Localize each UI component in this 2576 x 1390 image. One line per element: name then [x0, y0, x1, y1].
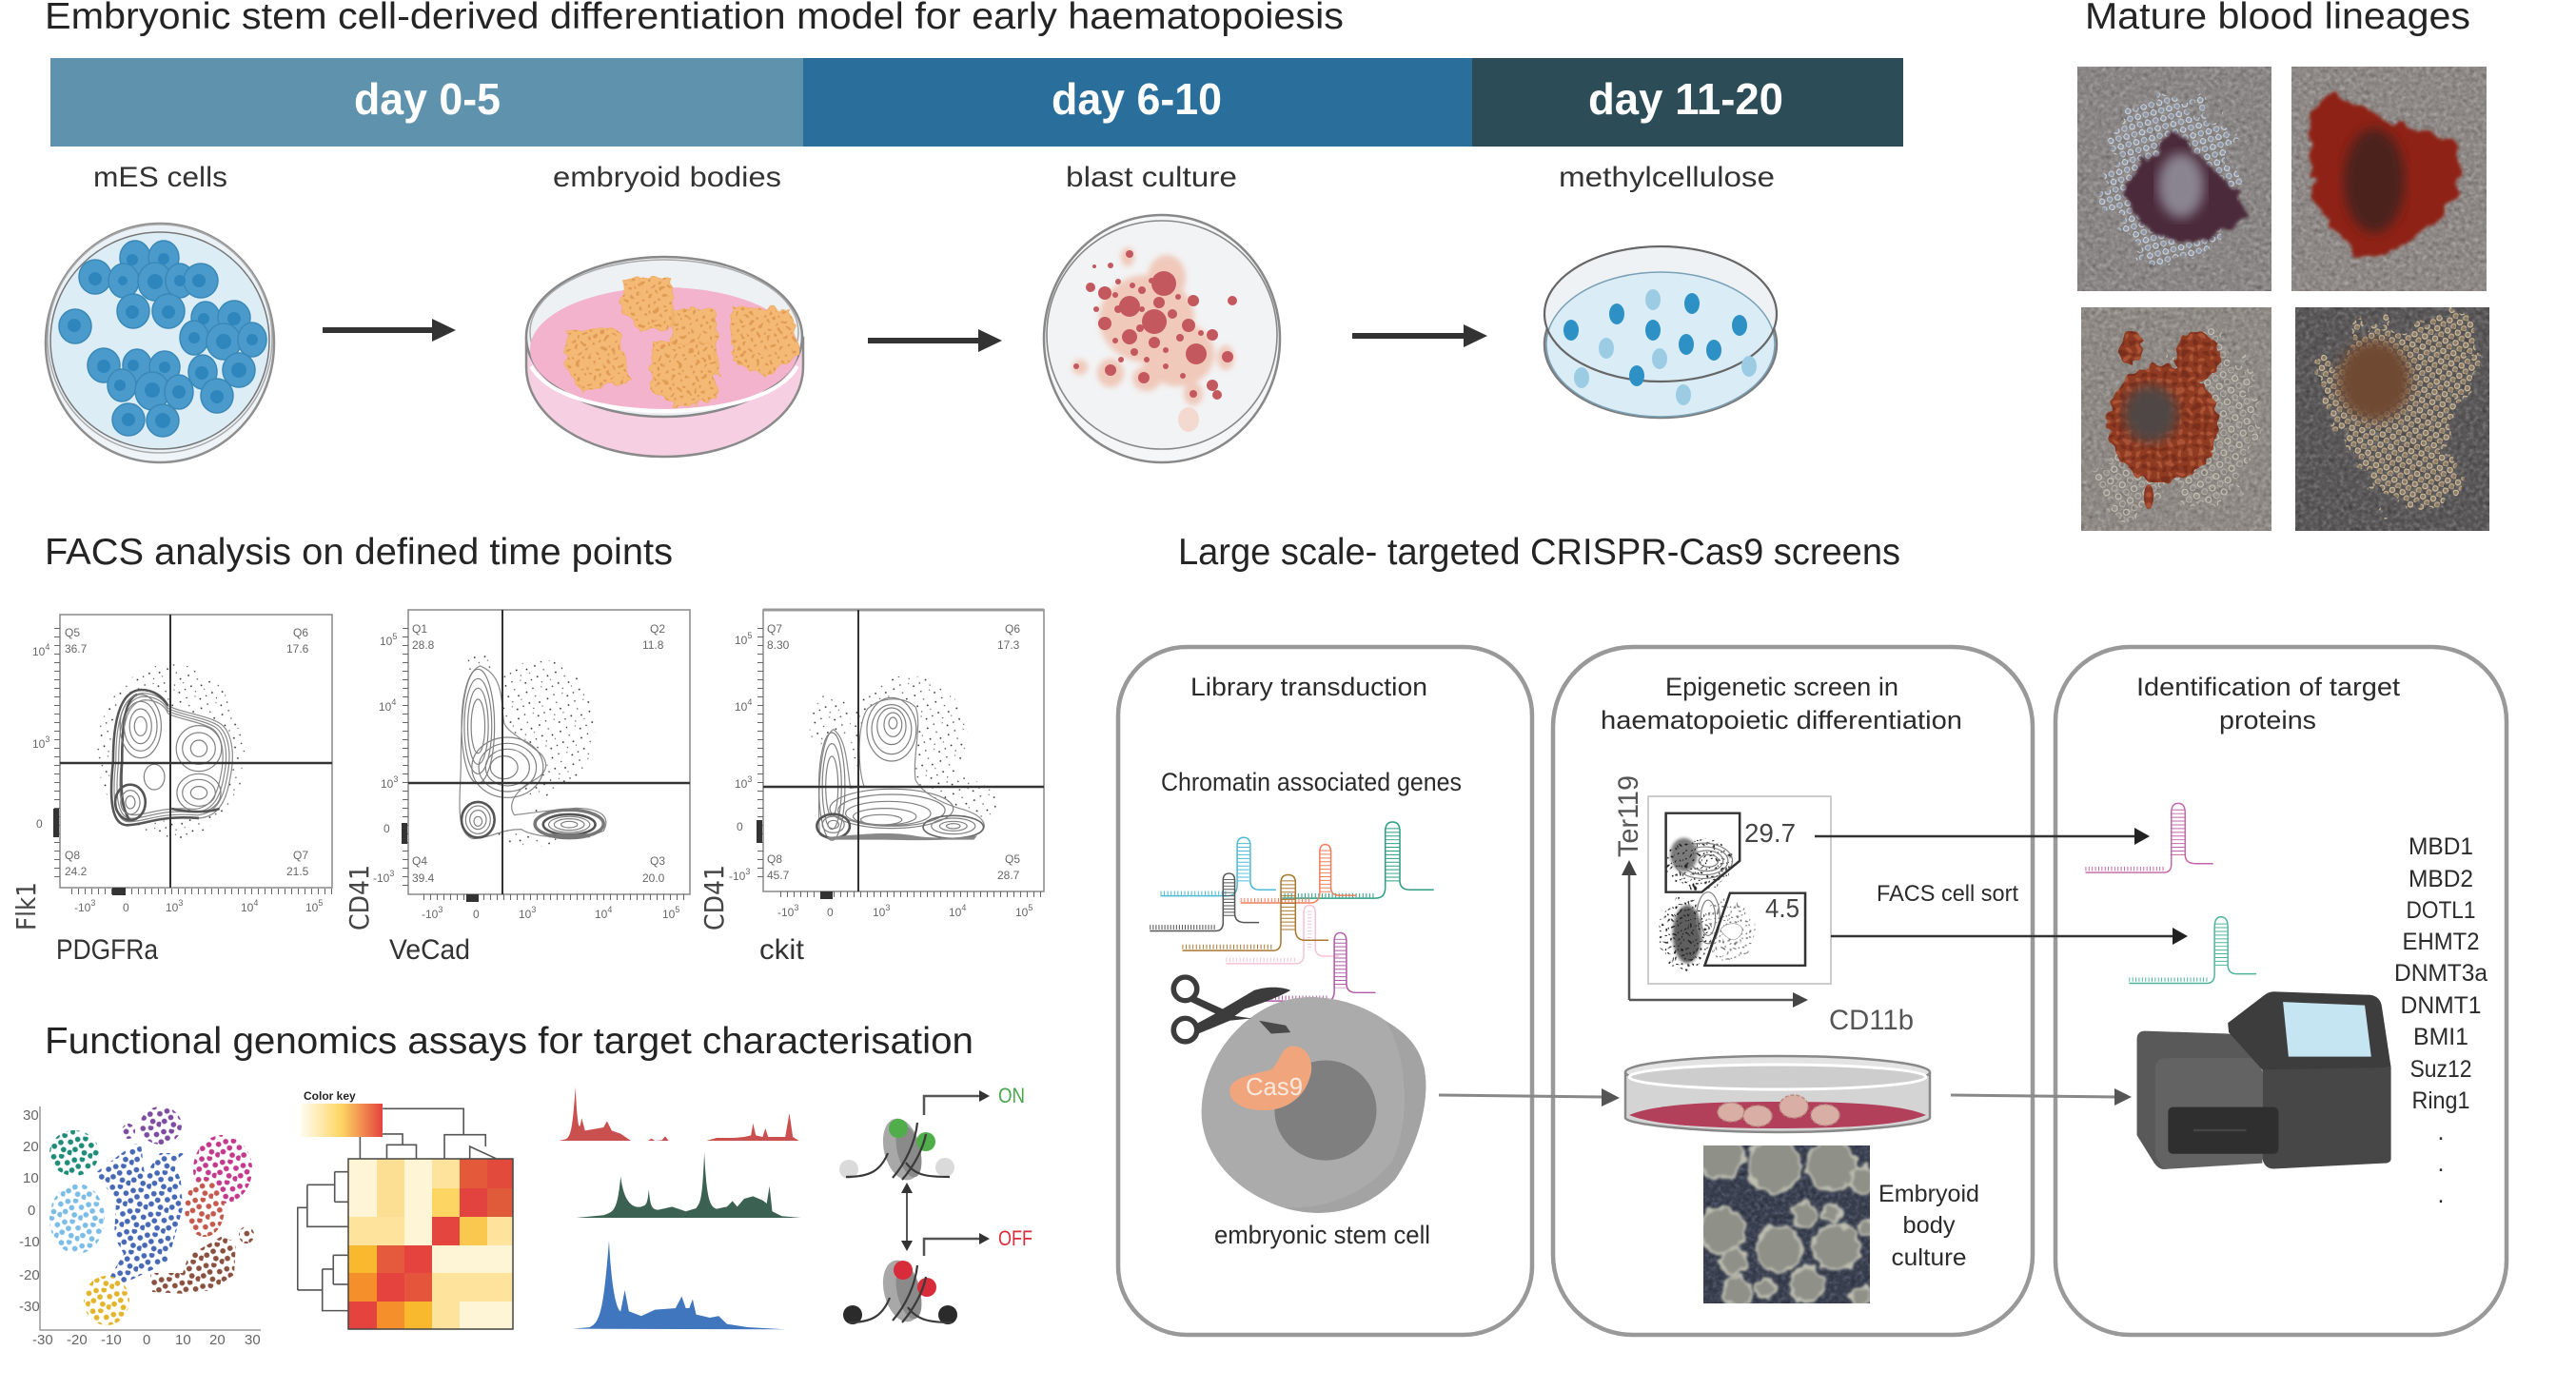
photo: colony 3 [2081, 307, 2271, 531]
arrow [868, 329, 1002, 352]
chart: FACS plot ckit vs CD41: 4 [961, 903, 966, 912]
list: target genes: . [2438, 1119, 2444, 1145]
chart: FACS plot VeCad vs CD41: 11.8 [642, 638, 664, 652]
diagram: nucleosome OFF state: OFF [998, 1226, 1032, 1250]
chart: genomic signal tracks [559, 1087, 801, 1329]
label: mES cells: mES cells [93, 162, 227, 193]
photo: embryoid body culture [1703, 1145, 1870, 1303]
chart: FACS plot VeCad vs CD41: 10 [379, 700, 391, 714]
axis label: ckit: ckit [759, 934, 805, 966]
chart: Ter119 vs CD11b gating: 4.5 [1765, 893, 1799, 923]
list: target genes: Ring1 [2411, 1087, 2470, 1114]
chart: FACS plot PDGFRa vs Flk1: Q5 [65, 626, 80, 639]
chart: FACS plot VeCad vs CD41: 0 [473, 908, 480, 921]
list: target genes: . [2438, 1150, 2444, 1177]
chart: FACS plot PDGFRa vs Flk1: 10 [305, 901, 318, 914]
diagram: nucleosome ON state: ON [998, 1084, 1025, 1107]
list: target genes: DNMT1 [2400, 992, 2482, 1019]
chart: FACS plot ckit vs CD41: 17.3 [997, 638, 1020, 652]
chart: t-SNE scatter: -20 [19, 1267, 40, 1283]
chart: FACS plot VeCad vs CD41: 3 [531, 905, 536, 914]
chart: FACS plot VeCad vs CD41: -10 [373, 871, 389, 885]
list: target genes: MBD1 [2409, 833, 2473, 860]
arrow: sort gate to green sgRNA [1831, 928, 2188, 945]
label: chromatin associated genes: Chromatin associated genes [1161, 768, 1462, 796]
chart: FACS plot PDGFRa vs Flk1: 3 [90, 898, 95, 908]
icon: blast culture dish [1044, 215, 1280, 462]
icon: sgRNA library [1150, 822, 1434, 1001]
chart: FACS plot PDGFRa vs Flk1: Q7 [293, 849, 308, 862]
list: target genes [2394, 833, 2488, 1208]
chart: FACS plot ckit vs CD41: 10 [949, 906, 961, 919]
panel heading [1601, 673, 1962, 734]
list: target genes: Suz12 [2409, 1056, 2472, 1083]
axis label: CD41: CD41 [698, 865, 730, 930]
chart: FACS plot PDGFRa vs Flk1: 4 [253, 898, 258, 908]
icon: embryoid body dish [526, 257, 803, 457]
chart: FACS plot PDGFRa vs Flk1: 10 [166, 901, 178, 914]
chart: FACS plot PDGFRa vs Flk1: 0 [123, 901, 129, 914]
arrow: switch between states [901, 1183, 913, 1251]
chart: FACS plot ckit vs CD41: 8.30 [767, 638, 790, 652]
icon: scissors [1173, 977, 1290, 1042]
chart: FACS plot VeCad vs CD41: 10 [519, 908, 531, 921]
chart: FACS plot VeCad vs CD41: 10 [381, 777, 393, 791]
label: methylcellulose: methylcellulose [1559, 162, 1775, 193]
heading: FACS analysis: FACS analysis on defined time points [45, 532, 673, 573]
bar segment: day 6-10 [803, 58, 1472, 147]
photo: colony 1 [2077, 67, 2271, 291]
chart: FACS plot ckit vs CD41: 5 [747, 631, 752, 640]
chart: FACS plot ckit vs CD41: 10 [873, 906, 885, 919]
chart: FACS plot ckit vs CD41: 45.7 [767, 869, 790, 882]
label: embryoid body culture [1878, 1181, 1979, 1271]
panel: epigenetic screen [1553, 647, 2033, 1335]
chart: FACS plot VeCad vs CD41: -10 [422, 908, 438, 921]
chart: FACS plot VeCad vs CD41: Q1 [412, 622, 427, 636]
chart: FACS plot ckit vs CD41: 10 [735, 634, 747, 647]
chart: FACS plot VeCad vs CD41: 39.4 [412, 871, 435, 885]
chart: FACS plot PDGFRa vs Flk1: 24.2 [65, 865, 88, 878]
chart: FACS plot PDGFRa vs Flk1: 3 [45, 734, 49, 744]
bar segment: day 0-5: day 0-5 [354, 74, 501, 124]
chart: FACS plot ckit vs CD41: Q7 [767, 622, 782, 636]
photo: colony 2 [2291, 67, 2487, 291]
legend: colour key: Color key [304, 1089, 356, 1103]
chart: FACS plot ckit vs CD41: 0 [737, 820, 743, 833]
chart: t-SNE scatter: 30 [23, 1107, 39, 1124]
list: target genes: EHMT2 [2402, 929, 2480, 955]
list: target genes: DOTL1 [2406, 897, 2476, 924]
label: embryoid body culture: culture [1892, 1244, 1966, 1271]
chart: FACS plot VeCad vs CD41: 0 [383, 822, 390, 835]
chart: FACS plot ckit vs CD41 [729, 610, 1044, 919]
chart: FACS plot ckit vs CD41: 28.7 [997, 869, 1020, 882]
arrow [1352, 324, 1487, 347]
chart: FACS plot PDGFRa vs Flk1: Q8 [65, 849, 80, 862]
chart: FACS plot ckit vs CD41: Q6 [1005, 622, 1020, 636]
chart: FACS plot VeCad vs CD41: 3 [393, 774, 398, 784]
label: embryoid bodies: embryoid bodies [553, 162, 781, 193]
heading: functional genomics: Functional genomics assays for target characterisation [45, 1021, 973, 1062]
chart: FACS plot ckit vs CD41: 3 [747, 774, 752, 784]
list: target genes: MBD2 [2409, 866, 2473, 892]
chart: FACS plot VeCad vs CD41: 3 [438, 905, 442, 914]
chart: FACS plot PDGFRa vs Flk1: 4 [45, 642, 49, 652]
panel heading: Library transduction [1190, 673, 1427, 701]
chart: FACS plot PDGFRa vs Flk1: 3 [178, 898, 183, 908]
chart: FACS plot ckit vs CD41: 0 [827, 906, 834, 919]
chart: FACS plot VeCad vs CD41: 28.8 [412, 638, 435, 652]
chart: FACS plot PDGFRa vs Flk1: 0 [36, 817, 43, 831]
chart: t-SNE scatter: 10 [23, 1170, 39, 1186]
list: target genes: . [2438, 1182, 2444, 1208]
chart: FACS plot PDGFRa vs Flk1 [32, 615, 332, 914]
chart: FACS plot PDGFRa vs Flk1: 10 [32, 645, 45, 658]
label: blast culture: blast culture [1066, 162, 1237, 193]
chart: FACS plot ckit vs CD41: 3 [745, 867, 750, 876]
chart: FACS plot VeCad vs CD41: Q2 [650, 622, 665, 636]
chart: FACS plot ckit vs CD41: 10 [735, 700, 747, 714]
bar segment: day 6-10: day 6-10 [1052, 74, 1222, 124]
icon: embryonic stem cell with Cas9 [1202, 997, 1426, 1213]
label: embryoid body culture: body [1903, 1212, 1956, 1239]
axis label: PDGFRa: PDGFRa [56, 934, 158, 966]
axis label: CD41: CD41 [344, 865, 375, 930]
chart: FACS plot VeCad vs CD41: 4 [607, 905, 612, 914]
panel heading [2136, 673, 2401, 734]
arrow: dish to sequencer [1951, 1088, 2132, 1106]
icon: sequencer [2137, 991, 2391, 1169]
chart: t-SNE scatter: -10 [19, 1234, 40, 1250]
chart: FACS plot ckit vs CD41: 10 [735, 777, 747, 791]
label: FACS cell sort: FACS cell sort [1877, 881, 2018, 907]
icon: culture dish [1625, 1056, 1930, 1132]
icon: sorted sgRNA magenta [2085, 803, 2213, 872]
bar segment: day 11-20 [1472, 58, 1903, 147]
arrow [323, 319, 456, 342]
chart: t-SNE scatter: -20 [67, 1332, 88, 1348]
chart: FACS plot VeCad vs CD41: 20.0 [642, 871, 665, 885]
panel: identification of target proteins [2055, 647, 2507, 1335]
chart: FACS plot ckit vs CD41: 4 [747, 697, 752, 707]
bar segment: day 0-5 [50, 58, 803, 147]
panel heading: Identification of target [2136, 673, 2401, 701]
chart: Ter119 vs CD11b gating: Ter119 [1613, 775, 1644, 857]
chart: t-SNE scatter: -30 [19, 1299, 40, 1315]
chart: FACS plot ckit vs CD41: 5 [1028, 903, 1032, 912]
chart: FACS plot VeCad vs CD41: 5 [675, 905, 679, 914]
panel: library transduction [1118, 647, 1532, 1335]
bar segment: day 11-20: day 11-20 [1588, 74, 1783, 124]
chart: FACS plot PDGFRa vs Flk1: 17.6 [286, 642, 309, 656]
icon: embryonic stem cell with Cas9: Cas9 [1246, 1072, 1303, 1101]
chart: FACS plot VeCad vs CD41: 10 [380, 635, 392, 648]
diagram: nucleosome OFF state [843, 1226, 1032, 1326]
heading: CRISPR screens: Large scale- targeted CRISPR-Cas9 screens [1178, 532, 1900, 573]
panel heading: proteins [2219, 706, 2316, 734]
chart: t-SNE scatter: 0 [143, 1332, 150, 1348]
panel heading: Epigenetic screen in [1665, 673, 1898, 701]
list: target genes: DNMT3a [2394, 960, 2488, 987]
panel heading: haematopoietic differentiation [1601, 706, 1962, 734]
timeline bar [50, 58, 1903, 147]
chart: heatmap [298, 1089, 513, 1329]
label: embryonic stem cell: embryonic stem cell [1214, 1221, 1430, 1249]
list: target genes: BMI1 [2413, 1024, 2468, 1050]
chart: FACS plot PDGFRa vs Flk1: 5 [318, 898, 323, 908]
label: embryoid body culture: Embryoid [1878, 1181, 1979, 1207]
chart: FACS plot ckit vs CD41: 10 [1015, 906, 1028, 919]
chart: FACS plot ckit vs CD41: Q5 [1005, 852, 1020, 866]
chart: t-SNE scatter: 20 [23, 1139, 39, 1155]
icon: sorted sgRNA green [2129, 917, 2256, 983]
chart: FACS plot PDGFRa vs Flk1: Q6 [293, 626, 308, 639]
chart: t-SNE scatter [19, 1106, 261, 1348]
diagram: nucleosome ON state [839, 1084, 1025, 1184]
photo: colony 4 [2295, 307, 2489, 531]
chart: FACS plot PDGFRa vs Flk1: 36.7 [65, 642, 88, 656]
chart: FACS plot PDGFRa vs Flk1: 10 [241, 901, 253, 914]
chart: FACS plot VeCad vs CD41 [373, 610, 690, 921]
chart: Ter119 vs CD11b gating: 29.7 [1744, 818, 1796, 848]
chart: FACS plot VeCad vs CD41: 4 [391, 697, 396, 707]
icon: methylcellulose dish [1544, 246, 1777, 418]
chart: Ter119 vs CD11b gating [1613, 775, 1914, 1036]
chart: FACS plot VeCad vs CD41: 10 [662, 908, 675, 921]
axis label: Flk1: Flk1 [10, 882, 42, 930]
axis label: VeCad: VeCad [389, 934, 470, 966]
chart: FACS plot PDGFRa vs Flk1: -10 [74, 901, 90, 914]
chart: FACS plot ckit vs CD41: -10 [729, 870, 745, 883]
chart: t-SNE scatter: 10 [175, 1332, 191, 1348]
chart: FACS plot PDGFRa vs Flk1: 21.5 [286, 865, 309, 878]
chart: FACS plot VeCad vs CD41: 5 [392, 632, 397, 641]
icon: mES cell dish [46, 224, 274, 462]
legend: colour key [301, 1089, 383, 1137]
arrow: sort gate to magenta sgRNA [1815, 828, 2150, 845]
chart: FACS plot ckit vs CD41: 3 [794, 903, 798, 912]
chart: FACS plot VeCad vs CD41: Q3 [650, 854, 665, 868]
chart: t-SNE scatter: -30 [32, 1332, 53, 1348]
chart: FACS plot VeCad vs CD41: 3 [389, 869, 394, 878]
chart: FACS plot ckit vs CD41: Q8 [767, 852, 782, 866]
chart: FACS plot PDGFRa vs Flk1: 10 [32, 737, 45, 751]
chart: t-SNE scatter: 20 [209, 1332, 226, 1348]
chart: FACS plot ckit vs CD41: 3 [885, 903, 890, 912]
chart: t-SNE scatter: 0 [28, 1203, 35, 1219]
chart: FACS plot VeCad vs CD41: 10 [595, 908, 607, 921]
chart: FACS plot VeCad vs CD41: Q4 [412, 854, 427, 868]
arrow: cell to dish [1439, 1088, 1620, 1106]
chart: FACS plot ckit vs CD41: -10 [777, 906, 794, 919]
chart: Ter119 vs CD11b gating: CD11b [1829, 1005, 1914, 1036]
chart: t-SNE scatter: 30 [245, 1332, 261, 1348]
chart: t-SNE scatter: -10 [101, 1332, 122, 1348]
